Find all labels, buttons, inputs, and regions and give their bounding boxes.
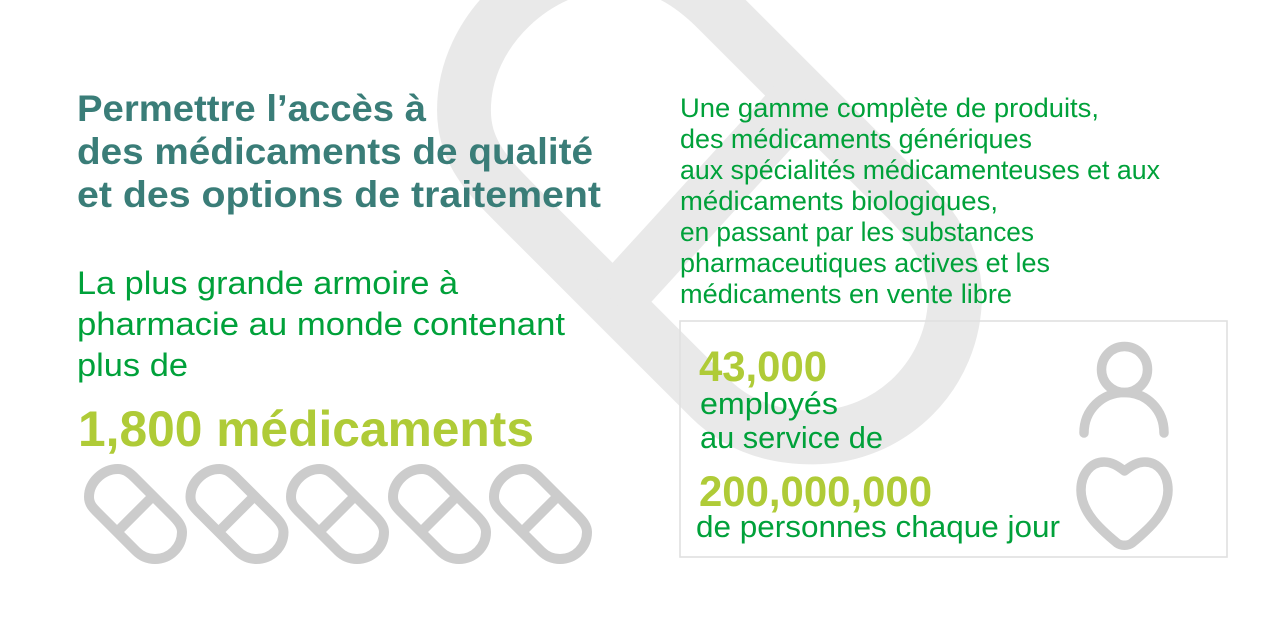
panel border	[680, 321, 1227, 557]
icon row: five capsules	[89, 469, 587, 559]
text block: largest medicine cabinet: pharmacie au monde contenant	[77, 306, 565, 342]
label: employés au service de	[700, 386, 883, 455]
title: et des options de traitement	[77, 174, 601, 215]
icon: capsule 4	[393, 469, 486, 559]
text block: range of products: pharmaceutiques actives et les	[680, 248, 1050, 278]
text block: range of products: en passant par les substances	[680, 217, 1034, 247]
text block: range of products: Une gamme complète de produits,	[680, 93, 1099, 123]
text block: range of products: médicaments en vente libre	[680, 279, 1012, 309]
panel: employees and people served	[680, 321, 1227, 557]
background: large capsule watermark	[464, 0, 955, 437]
icon: heart	[1081, 462, 1168, 545]
label: employés au service de: au service de	[700, 420, 883, 455]
label: employés au service de: employés	[700, 386, 838, 421]
text block: range of products: des médicaments génériques	[680, 124, 1032, 154]
icon: capsule 1	[89, 469, 182, 559]
text block: largest medicine cabinet: La plus grande armoire à	[77, 265, 458, 301]
icon: capsule 5	[494, 469, 587, 559]
icon: capsule 2	[190, 469, 284, 559]
title	[77, 88, 601, 215]
text block: range of products: médicaments biologiques,	[680, 186, 998, 216]
icon: capsule 3	[291, 469, 384, 559]
title: des médicaments de qualité	[77, 131, 593, 172]
text block: range of products	[680, 93, 1160, 309]
text block: range of products: aux spécialités médicamenteuses et aux	[680, 155, 1160, 185]
label: de personnes chaque jour: de personnes chaque jour	[696, 509, 1060, 544]
statistic: 43,000: 43,000	[699, 343, 827, 391]
statistic: 1,800 medicines: 1,800 médicaments	[78, 401, 534, 457]
statistic: 200,000,000: 200,000,000	[699, 468, 932, 516]
icon: person	[1084, 346, 1164, 433]
text block: largest medicine cabinet: plus de	[77, 347, 188, 383]
text block: largest medicine cabinet	[77, 265, 565, 383]
title: Permettre l’accès à	[77, 88, 426, 129]
